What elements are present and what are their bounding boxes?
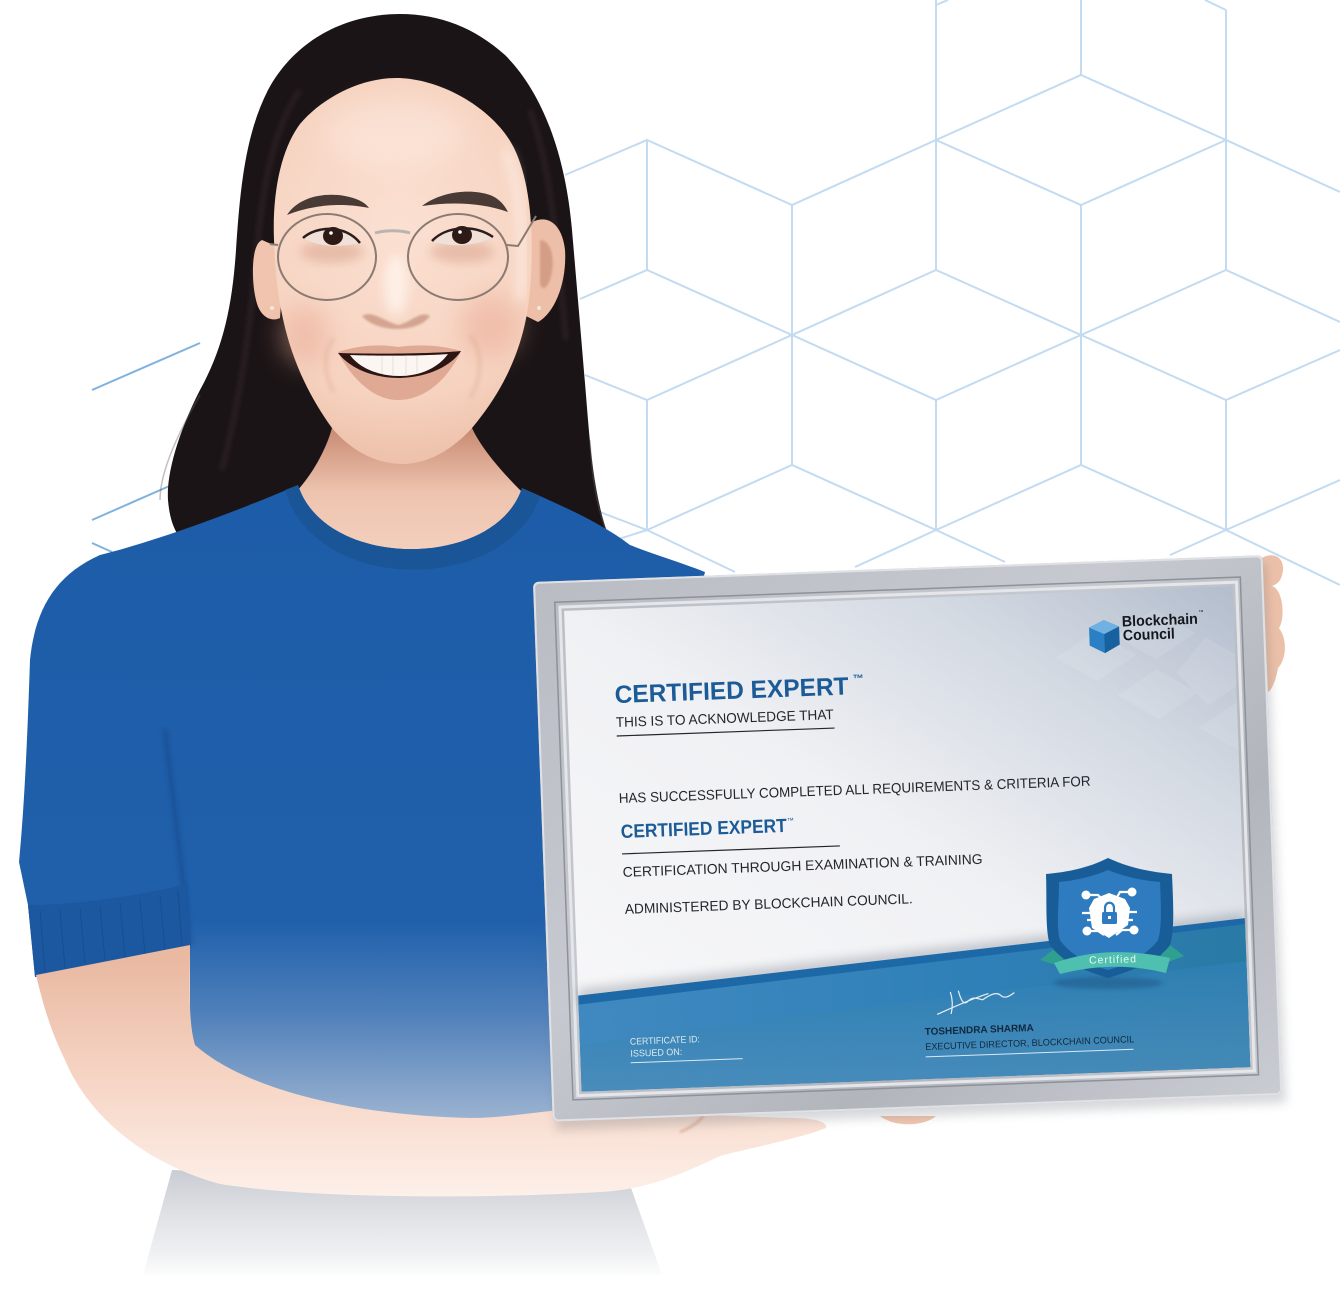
- certification statement: CERTIFICATION THROUGH EXAMINATION & TRAINING: [622, 851, 983, 880]
- circuit icon: [1082, 888, 1138, 938]
- signature: [936, 989, 1015, 1014]
- lower blue panel: [578, 961, 1250, 1092]
- certification name: CERTIFIED EXPERT: [620, 816, 787, 843]
- forearm and hand: [36, 945, 826, 1196]
- issued on: ISSUED ON:: [630, 1047, 683, 1060]
- logo text: [1122, 609, 1205, 644]
- right eye: [432, 226, 493, 245]
- blue band shadow: [576, 912, 1247, 1005]
- sleeve cuff: [28, 884, 191, 977]
- cheek blush: [281, 293, 520, 365]
- certified shield badge: [1040, 858, 1184, 989]
- neck: [296, 428, 522, 566]
- dark blue band: [576, 918, 1250, 1092]
- right ear: [524, 219, 565, 322]
- forehead shine: [325, 100, 465, 170]
- hexagon line background: [565, 0, 1340, 585]
- diamond pattern: [1054, 606, 1239, 757]
- badge shadow: [1053, 977, 1163, 989]
- smile lines: [326, 335, 480, 398]
- mouth: [338, 351, 461, 378]
- earrings: [270, 306, 541, 310]
- paper: [564, 586, 1250, 1092]
- left eyebrow: [287, 195, 369, 215]
- fingers behind certificate: [1262, 555, 1285, 692]
- right ear inner shadow: [540, 240, 553, 288]
- right eyebrow: [422, 192, 508, 212]
- administered statement: ADMINISTERED BY BLOCKCHAIN COUNCIL.: [625, 890, 913, 917]
- logo text: Council: [1123, 626, 1175, 644]
- shield inner: [1058, 870, 1161, 970]
- logo text: ™: [1198, 609, 1204, 616]
- silver frame: [533, 555, 1282, 1122]
- thumb crease: [680, 1114, 704, 1132]
- sleeve shading: [165, 730, 190, 945]
- requirements statement: HAS SUCCESSFULLY COMPLETED ALL REQUIREMENTS & CRITERIA FOR: [618, 773, 1091, 806]
- blue panel: [576, 924, 1250, 1092]
- fingers under certificate: [880, 1116, 936, 1124]
- signatory role: EXECUTIVE DIRECTOR, BLOCKCHAIN COUNCIL: [925, 1034, 1134, 1053]
- certificate: [533, 555, 1282, 1122]
- temple shine: [505, 150, 522, 300]
- cuff ribbing: [40, 890, 182, 972]
- sweater: [19, 485, 705, 1131]
- eye socket shading: [300, 241, 494, 263]
- frame edge light: [534, 556, 1281, 1121]
- lips: [338, 345, 461, 400]
- left ear: [253, 240, 285, 319]
- glasses: [270, 214, 536, 300]
- certificate shadow: [537, 563, 1286, 1130]
- certification trademark: ™: [787, 818, 794, 825]
- sweater collar: [285, 485, 540, 570]
- certificate id: CERTIFICATE ID:: [630, 1034, 700, 1048]
- hair: [168, 14, 610, 545]
- shield outer: [1046, 858, 1173, 978]
- nose highlight: [384, 255, 408, 315]
- teeth gaps: [382, 356, 417, 376]
- inner frame highlight: [560, 582, 1254, 1096]
- blockchain council logo: [1089, 620, 1120, 654]
- ribbon tails: [1040, 942, 1184, 968]
- face: [274, 78, 532, 464]
- certified label: Certified: [1089, 953, 1136, 967]
- acknowledgement: THIS IS TO ACKNOWLEDGE THAT: [615, 706, 834, 730]
- pants: [143, 1170, 662, 1275]
- inner frame border: [555, 577, 1259, 1100]
- ribbon: [1054, 952, 1170, 974]
- logo text: Blockchain: [1122, 611, 1198, 630]
- left eye: [303, 227, 360, 246]
- nose: [362, 314, 430, 329]
- hair wisps: [160, 395, 606, 530]
- signatory name: TOSHENDRA SHARMA: [925, 1023, 1034, 1038]
- hair highlight: [222, 90, 566, 470]
- heading: CERTIFIED EXPERT: [614, 673, 849, 709]
- teeth: [350, 354, 448, 376]
- hexagon lines left of person: [92, 343, 200, 552]
- heading trademark: ™: [853, 673, 864, 685]
